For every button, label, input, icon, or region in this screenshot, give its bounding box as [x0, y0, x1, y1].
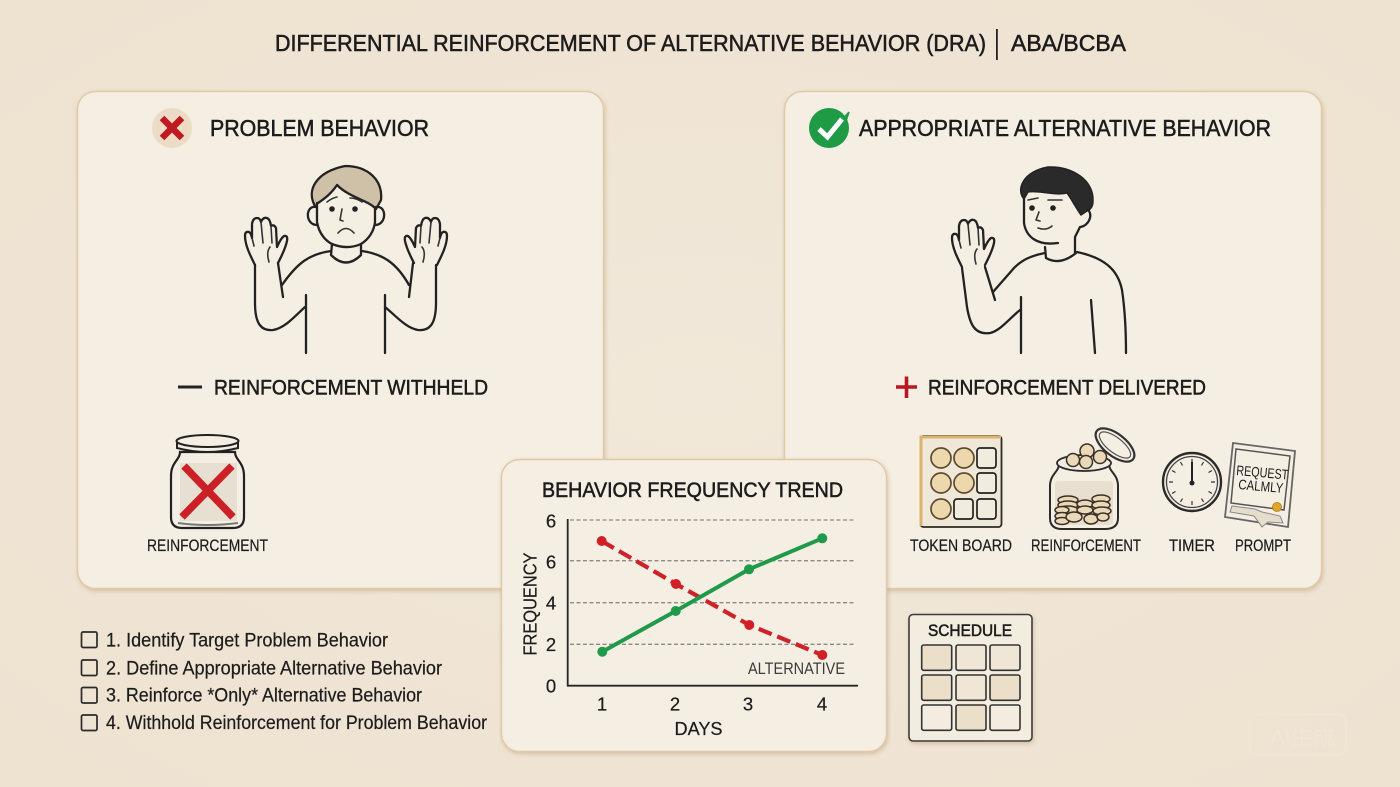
schedule heading: SCHEDULE: [928, 622, 1012, 640]
title: ABA/BCBA: [1011, 30, 1127, 56]
icon: right hand: [405, 218, 447, 265]
axes: [568, 519, 858, 686]
alternative behavior line (green): [597, 533, 827, 657]
y axis tick labels: 0: [546, 676, 556, 696]
heading: appropriate alternative behavior: APPROPRIATE ALTERNATIVE BEHAVIOR: [859, 115, 1271, 141]
reinforcement delivered label: REINFORCEMENT DELIVERED: [928, 376, 1206, 400]
jar label: REINFOrCEMENT: [1031, 537, 1141, 555]
icon: prompt card: CALMLY: [1238, 476, 1284, 496]
checklist item 3: 3. Reinforce *Only* Alternative Behavior: [106, 686, 423, 706]
chart title: BEHAVIOR FREQUENCY TREND: [542, 478, 843, 502]
title: DIFFERENTIAL REINFORCEMENT OF ALTERNATIVE BEHAVIOR (DRA): [275, 30, 986, 56]
icon: prompt card: REQUEST: [1236, 462, 1289, 483]
illustration: person with both hands raised: [245, 166, 447, 353]
x axis tick labels: 4: [817, 694, 827, 714]
panel: behavior frequency trend chart: [502, 460, 886, 752]
reinforcement withheld label: REINFORCEMENT WITHHELD: [214, 376, 488, 400]
icon: green check circle: [809, 108, 849, 148]
schedule grid: [922, 645, 1020, 730]
x axis tick labels: 2: [670, 694, 680, 714]
illustration: person raising one hand: [952, 167, 1126, 353]
line label: ALTERNATIVE: [748, 660, 845, 678]
checklist item 2: 2. Define Appropriate Alternative Behavior: [106, 658, 443, 680]
icon: token board: [920, 436, 1002, 527]
x axis tick labels: 3: [743, 694, 753, 714]
jar label: REINFORCEMENT: [147, 537, 268, 555]
icon: prompt card: [1225, 443, 1295, 527]
y axis tick labels: 4: [546, 592, 556, 614]
checklist item 4: 4. Withhold Reinforcement for Problem Behavior: [106, 713, 488, 734]
icon: raised hand: [952, 220, 994, 267]
icon: red x in tan circle: [152, 108, 192, 148]
y axis title: FREQUENCY: [520, 552, 540, 656]
problem behavior line (red dashed): [597, 536, 827, 660]
icon: left hand: [245, 218, 287, 265]
icon: open jar of coins: [1050, 422, 1140, 529]
schedule card: [909, 614, 1032, 741]
icon: empty reinforcement jar with x: [171, 435, 244, 528]
y axis tick labels: 2: [546, 634, 556, 655]
y axis tick labels: 6: [546, 552, 556, 572]
watermark: AI生成: [1270, 725, 1335, 750]
token board label: TOKEN BOARD: [910, 537, 1012, 555]
x axis tick labels: [597, 694, 827, 714]
panel: problem behavior: [78, 92, 604, 588]
x axis title: DAYS: [674, 718, 722, 739]
prompt label: PROMPT: [1235, 537, 1291, 555]
timer label: TIMER: [1169, 537, 1215, 555]
checklist item 1: 1. Identify Target Problem Behavior: [106, 630, 389, 652]
icon: timer clock: [1163, 453, 1221, 511]
panel: appropriate alternative behavior: [784, 92, 1322, 588]
checklist: [82, 630, 488, 734]
y axis tick labels: 6: [546, 510, 556, 532]
y axis tick labels: [546, 510, 556, 696]
watermark: [1250, 714, 1346, 755]
gridlines: [570, 520, 854, 644]
x axis tick labels: 1: [597, 694, 607, 714]
heading: problem behavior: PROBLEM BEHAVIOR: [210, 115, 429, 141]
